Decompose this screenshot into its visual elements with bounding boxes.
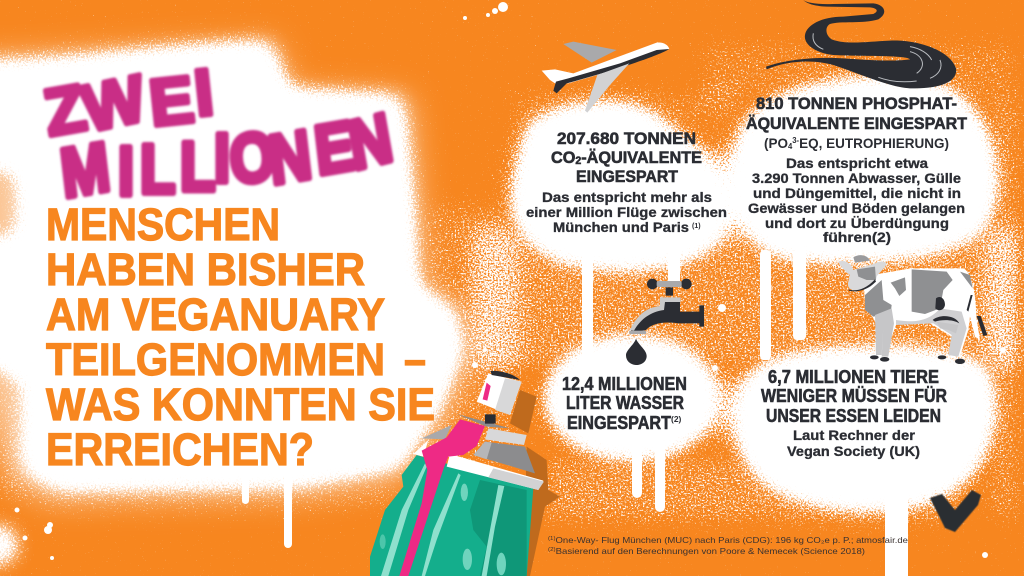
footnotes bbox=[548, 535, 908, 556]
panel text: phosphate: EQ, EUTROPHIERUNG) bbox=[799, 135, 949, 151]
icon: river bbox=[766, 0, 956, 88]
title: orange headline: MENSCHEN bbox=[46, 199, 280, 250]
title: orange headline: — bbox=[405, 334, 425, 385]
nozzle bbox=[485, 414, 496, 424]
title: spray lettering bbox=[39, 54, 398, 213]
footnotes: One-Way- Flug München (MUC) nach Paris (CDG): 196 kg CO₂e p. P.; atmosfair.de bbox=[556, 535, 908, 545]
title: orange headline: ERREICHEN? bbox=[46, 424, 314, 475]
can shadow bbox=[523, 447, 560, 576]
panel text: CO2: München und Paris bbox=[553, 220, 689, 235]
title: orange headline: TEILGENOMMEN bbox=[46, 334, 385, 385]
panel text: CO2: 2 bbox=[575, 155, 581, 167]
spray cloud: right panels bbox=[515, 81, 993, 507]
footnotes: Basierend auf den Berechnungen von Poore & Nemecek (Science 2018) bbox=[556, 546, 865, 556]
can shoulder bbox=[473, 442, 535, 473]
panel text: animals: Laut Rechner der bbox=[793, 428, 916, 443]
title: orange headline: HABEN BISHER bbox=[46, 244, 365, 295]
icon: cow bbox=[838, 255, 987, 364]
panel text: CO2: -ÄQUIVALENTE bbox=[581, 148, 702, 167]
footnotes: (2) bbox=[548, 547, 556, 553]
panel text: phosphate bbox=[746, 94, 968, 245]
panel text: CO2: einer Million Flüge zwischen bbox=[526, 205, 727, 220]
title: orange headline: AM VEGANUARY bbox=[46, 289, 385, 340]
panel text: phosphate: (PO bbox=[764, 135, 789, 151]
icon: spray can bbox=[370, 371, 560, 576]
panel text: phosphate: Das entspricht etwa bbox=[786, 156, 929, 171]
panel text: animals: Vegan Society (UK) bbox=[787, 444, 920, 459]
panel text: water: EINGESPART bbox=[567, 413, 671, 433]
can body bbox=[370, 455, 533, 576]
panel text: phosphate: 3.290 Tonnen Abwasser, Gülle bbox=[752, 171, 962, 186]
panel text: phosphate: 3- bbox=[792, 136, 799, 145]
panel text: CO2: (1) bbox=[692, 223, 701, 230]
panel text: CO2: Das entspricht mehr als bbox=[542, 190, 712, 205]
panel text: CO2: EINGESPART bbox=[576, 167, 679, 186]
panel text: water: 12,4 MILLIONEN bbox=[562, 374, 687, 394]
panel text: animals: UNSER ESSEN LEIDEN bbox=[766, 406, 941, 426]
title: orange headline: WAS KONNTEN SIE bbox=[46, 379, 435, 430]
spray haze: left panel bbox=[0, 44, 470, 500]
pink paint bbox=[399, 419, 485, 576]
panel text: CO2 bbox=[526, 129, 727, 235]
panel text: phosphate: Gewässer und Böden gelangen bbox=[748, 201, 965, 216]
panel text: CO2: CO bbox=[551, 148, 576, 167]
panel text: water bbox=[562, 374, 687, 433]
spray cloud: left panel bbox=[0, 44, 460, 563]
panel text: CO2: 207.680 TONNEN bbox=[557, 129, 696, 148]
icon: airplane bbox=[542, 42, 669, 113]
ZWEI: ZWEI bbox=[39, 54, 217, 150]
paint drips bbox=[242, 250, 908, 576]
panel text: water: (2) bbox=[671, 414, 682, 424]
panel text: phosphate: und Düngemittel, die nicht in bbox=[753, 186, 961, 201]
footnotes: (1) bbox=[548, 536, 556, 542]
icon: check mark bbox=[930, 490, 981, 532]
panel text: animals: 6,7 MILLIONEN TIERE bbox=[768, 367, 939, 387]
panel text: phosphate: führen(2) bbox=[823, 230, 891, 245]
icon: water tap bbox=[626, 279, 704, 365]
panel text: water: LITER WASSER bbox=[566, 393, 684, 413]
title: orange headline bbox=[46, 199, 435, 475]
panel text: phosphate: ÄQUIVALENTE EINGESPART bbox=[746, 114, 968, 133]
MILLIONEN: MILLIONEN bbox=[57, 98, 398, 213]
panel text: animals: WENIGER MÜSSEN FÜR bbox=[761, 386, 947, 406]
panel text: phosphate: und dort zu Überdüngung bbox=[765, 216, 949, 231]
panel text: animals bbox=[761, 367, 947, 459]
panel text: phosphate: 810 TONNEN PHOSPHAT- bbox=[756, 94, 957, 113]
panel text: phosphate: 4 bbox=[788, 142, 793, 151]
